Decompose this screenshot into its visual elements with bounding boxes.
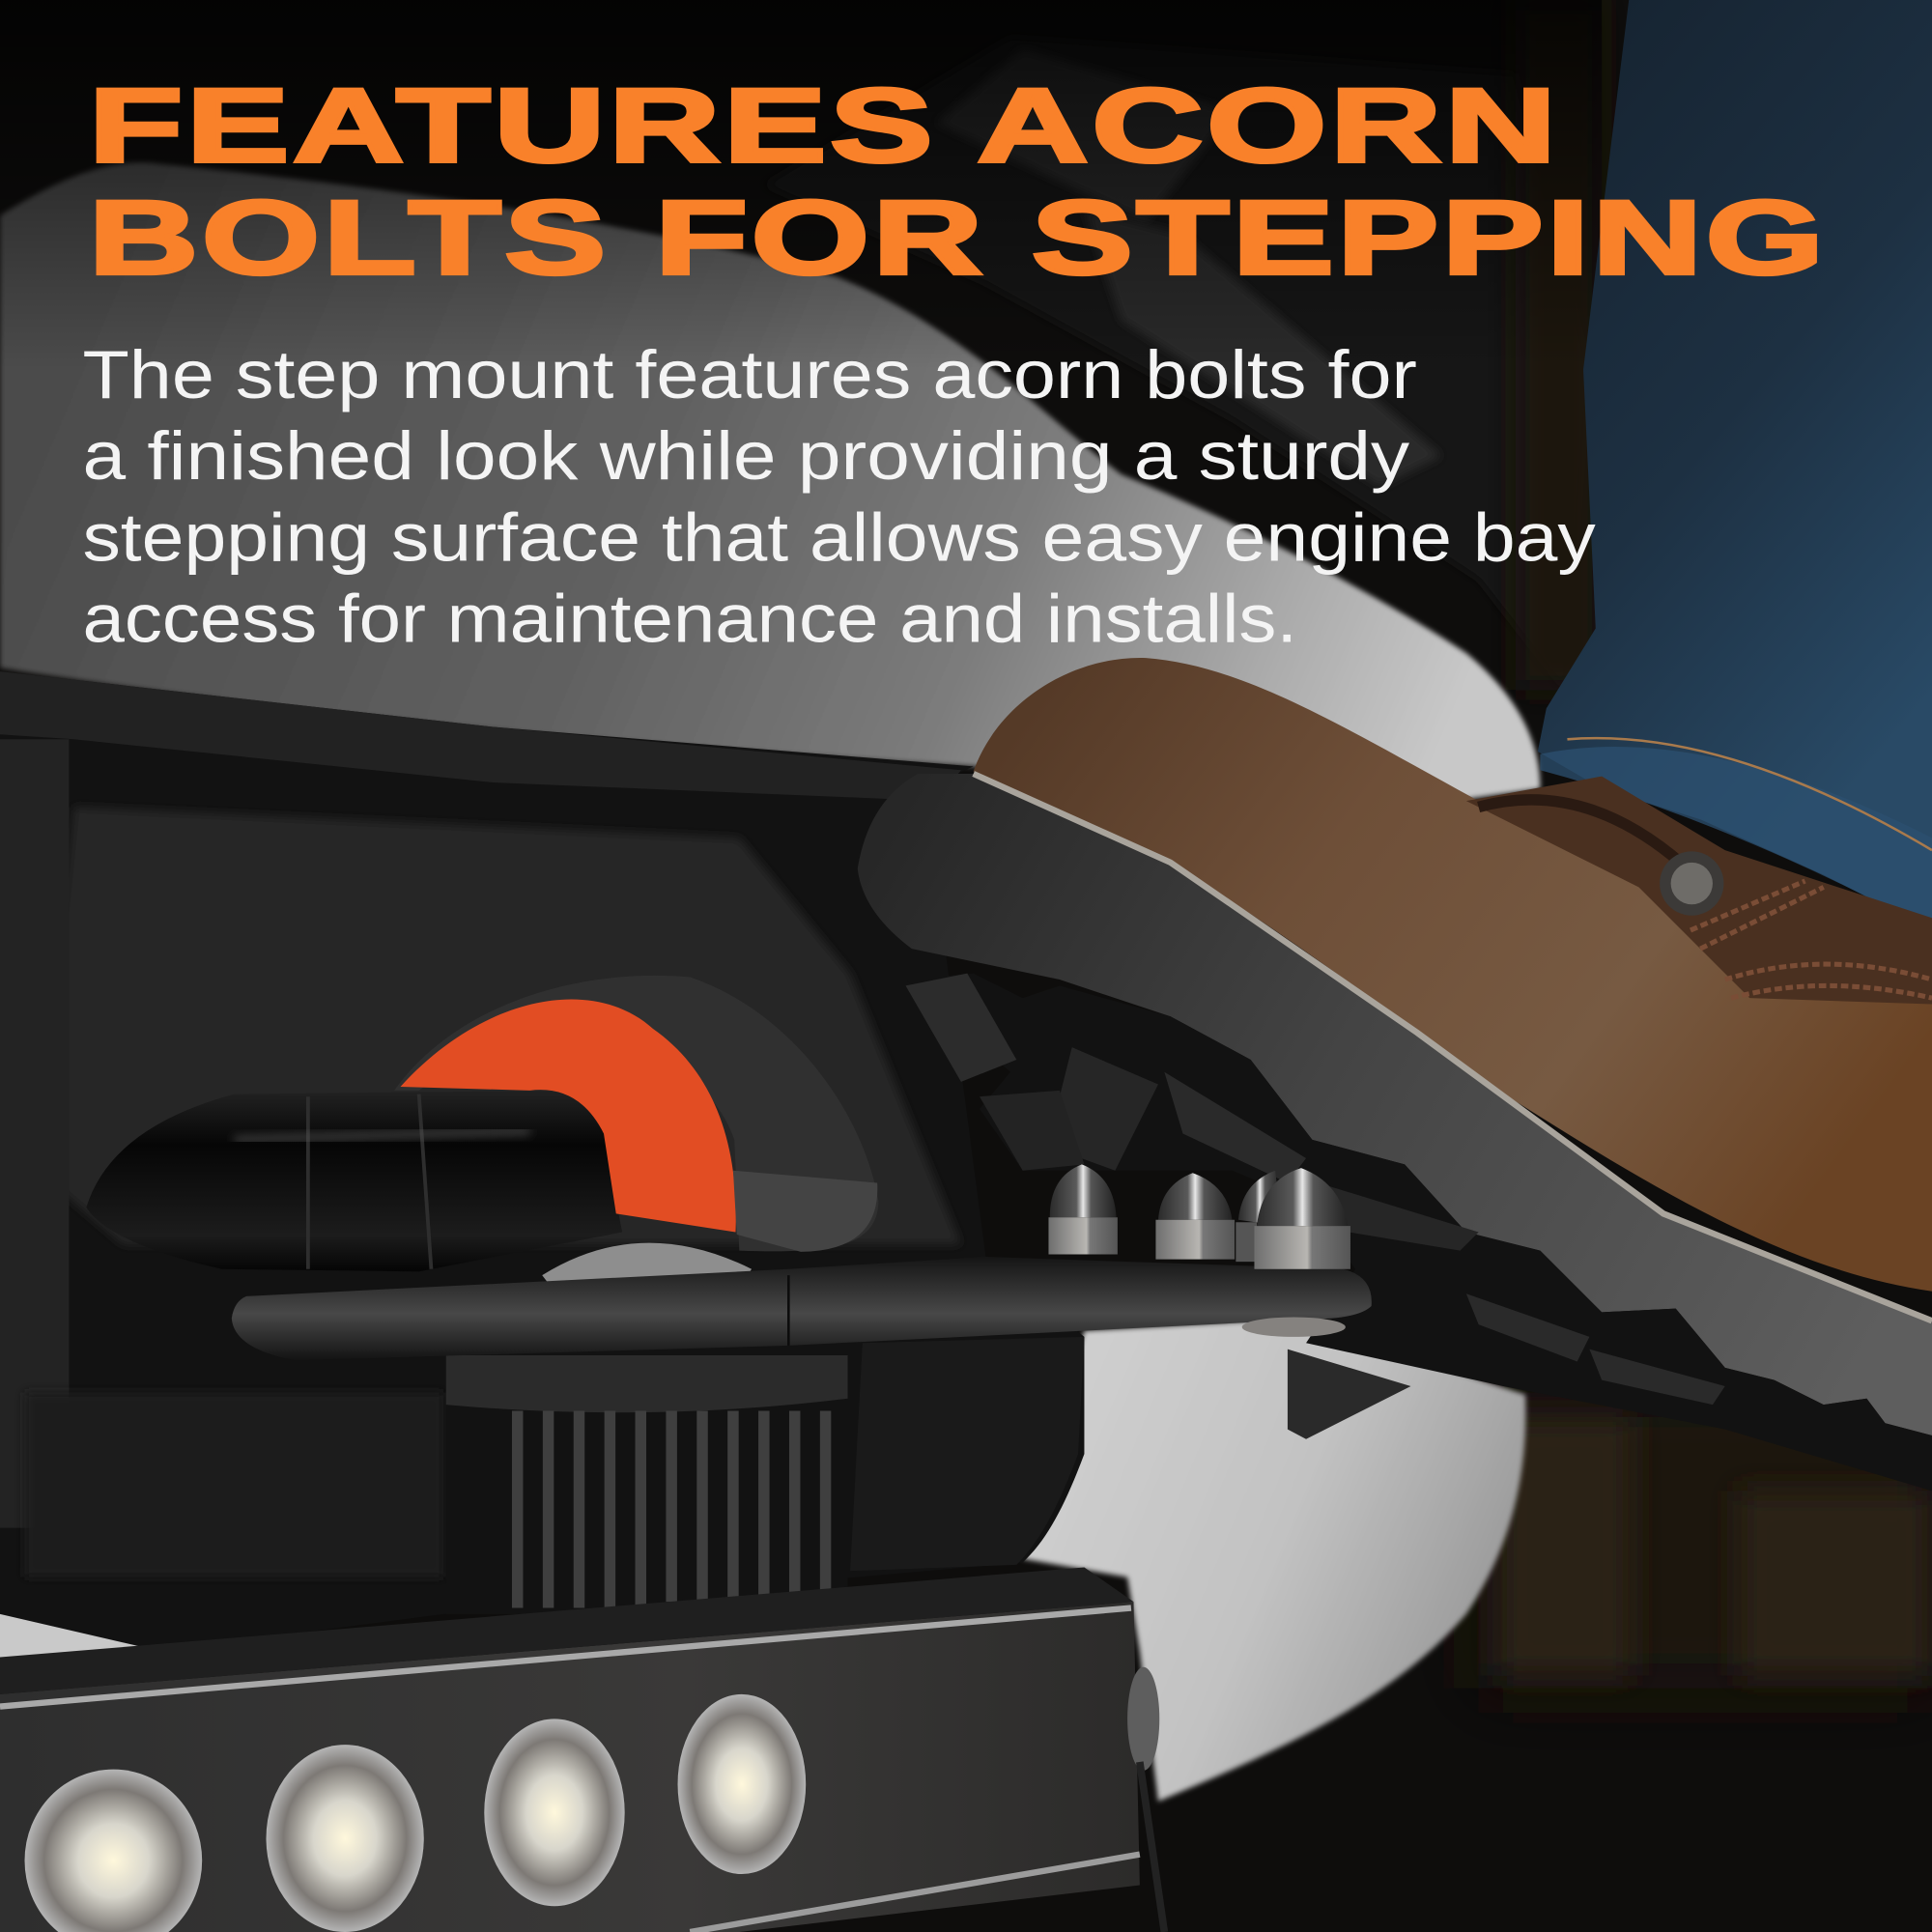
boot upper (974, 658, 1932, 1292)
recovery mount red insert and black shackle (394, 976, 878, 1292)
acorn bolts (1048, 1164, 1350, 1269)
engine bay behind fender (764, 0, 1602, 690)
black bumper wall (0, 671, 1084, 1663)
body text (82, 336, 1596, 657)
top shading over fender (0, 0, 1602, 370)
body text: a finished look while providing a sturdy (82, 417, 1409, 494)
knurled post (446, 1355, 848, 1614)
shock reservoir hose (86, 1091, 622, 1271)
LED lamps (25, 1694, 806, 1932)
dark vent in lower fender (1288, 1350, 1410, 1439)
LED light bar (0, 1567, 1164, 1932)
white fender upper (0, 162, 1540, 801)
title: FEATURES ACORN (89, 67, 1560, 184)
body text: The step mount features acorn bolts for (82, 336, 1417, 412)
title: BOLTS FOR STEPPING (89, 179, 1828, 296)
sole tread lugs (906, 974, 1932, 1491)
boot sole and rand (858, 774, 1932, 1435)
title (89, 67, 1828, 296)
step plate (232, 1257, 1372, 1360)
jeans (1538, 0, 1932, 930)
body text: access for maintenance and installs. (82, 581, 1297, 657)
body text: stepping surface that allows easy engine bay (82, 498, 1596, 575)
lower fender (1023, 1319, 1525, 1802)
